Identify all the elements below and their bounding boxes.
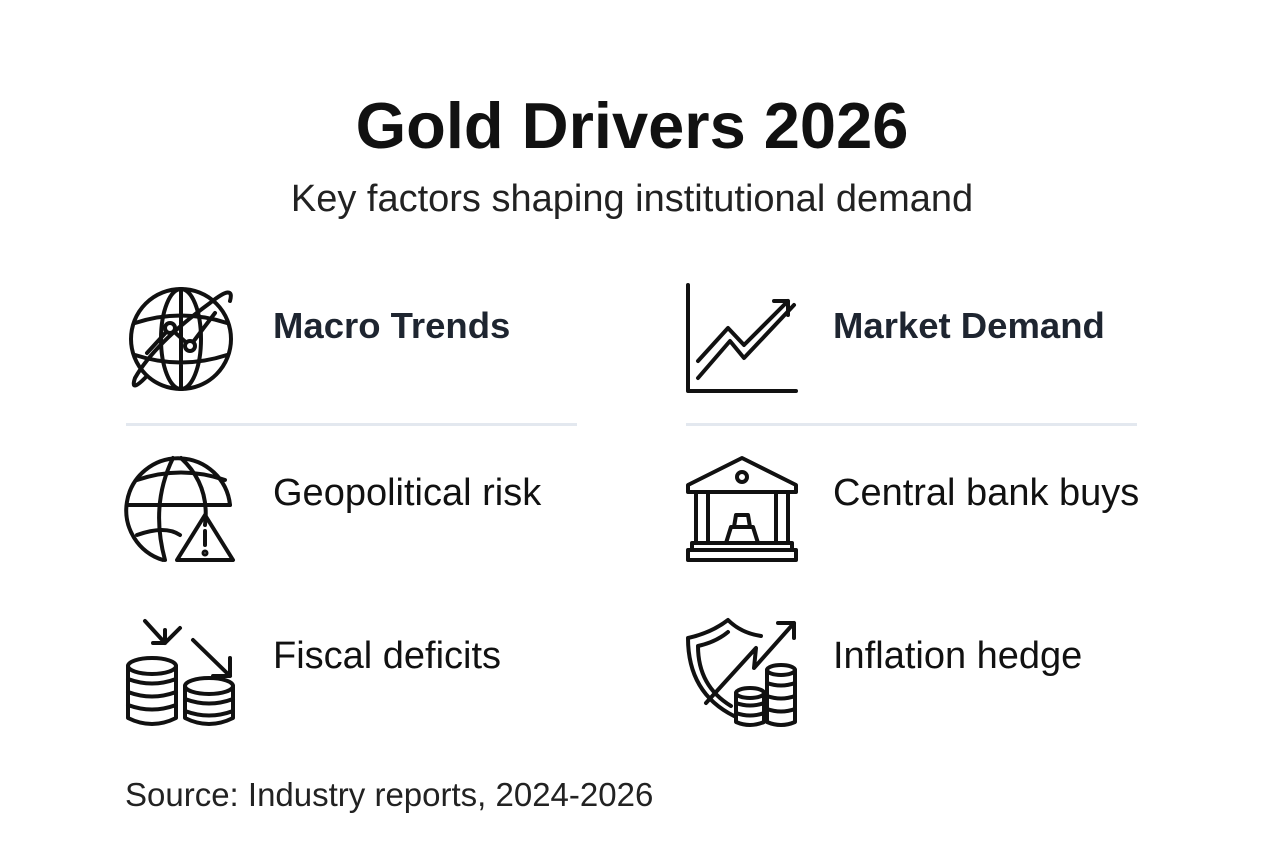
heading: Market Demand: Market Demand	[833, 305, 1105, 346]
icon: globe with warning	[124, 456, 236, 562]
label: Geopolitical risk: Geopolitical risk	[273, 472, 541, 514]
label: Central bank buys: Central bank buys	[833, 472, 1139, 514]
icon: globe with trend	[129, 287, 233, 391]
divider right	[686, 423, 1137, 426]
label: Inflation hedge: Inflation hedge	[833, 635, 1082, 677]
icon: line chart up	[686, 283, 798, 393]
heading: Macro Trends: Macro Trends	[273, 305, 510, 346]
icon: coins with down arrows	[126, 618, 236, 726]
subtitle: Key factors shaping institutional demand	[291, 178, 973, 220]
icon: bank with gold	[686, 456, 798, 562]
divider left	[126, 423, 577, 426]
icon: shield with arrow and coins	[686, 618, 798, 727]
label: Fiscal deficits: Fiscal deficits	[273, 635, 501, 677]
title: Gold Drivers 2026	[356, 89, 908, 162]
source note: Source: Industry reports, 2024-2026	[125, 776, 653, 813]
